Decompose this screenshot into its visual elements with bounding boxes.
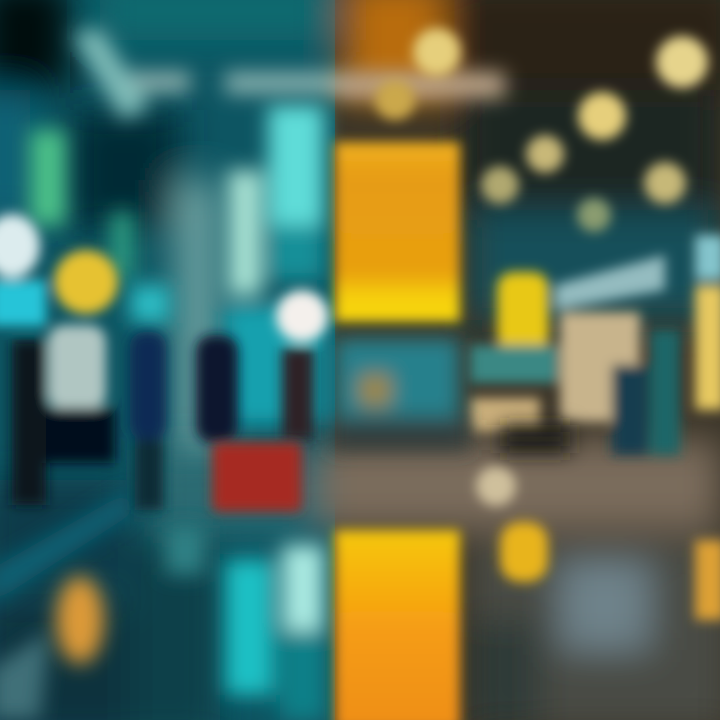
blurred heading band bbox=[72, 28, 505, 120]
dark ceiling and wall masses bbox=[0, 0, 720, 480]
left figures bbox=[0, 214, 238, 510]
teal reflection panels bbox=[165, 525, 325, 720]
white glow and figure near red case bbox=[276, 290, 328, 440]
yellow signs and right-side shopfronts bbox=[470, 235, 720, 620]
orange reflection panel bbox=[335, 530, 460, 720]
navy figure two bbox=[196, 335, 238, 443]
white lamp and cyan shape bbox=[0, 214, 40, 278]
teal window panels bbox=[30, 105, 325, 425]
yellow hard hat bbox=[54, 250, 118, 314]
yellow central panel bbox=[335, 142, 460, 322]
figure body bbox=[48, 325, 106, 410]
red suitcase bbox=[212, 442, 302, 512]
floor bbox=[0, 440, 720, 720]
ceiling lights bbox=[375, 28, 708, 232]
floor streaks left bbox=[0, 490, 130, 720]
mid-ground shop row bbox=[330, 338, 570, 453]
orange floor reflection bbox=[56, 576, 104, 664]
navy figure one bbox=[130, 332, 166, 440]
